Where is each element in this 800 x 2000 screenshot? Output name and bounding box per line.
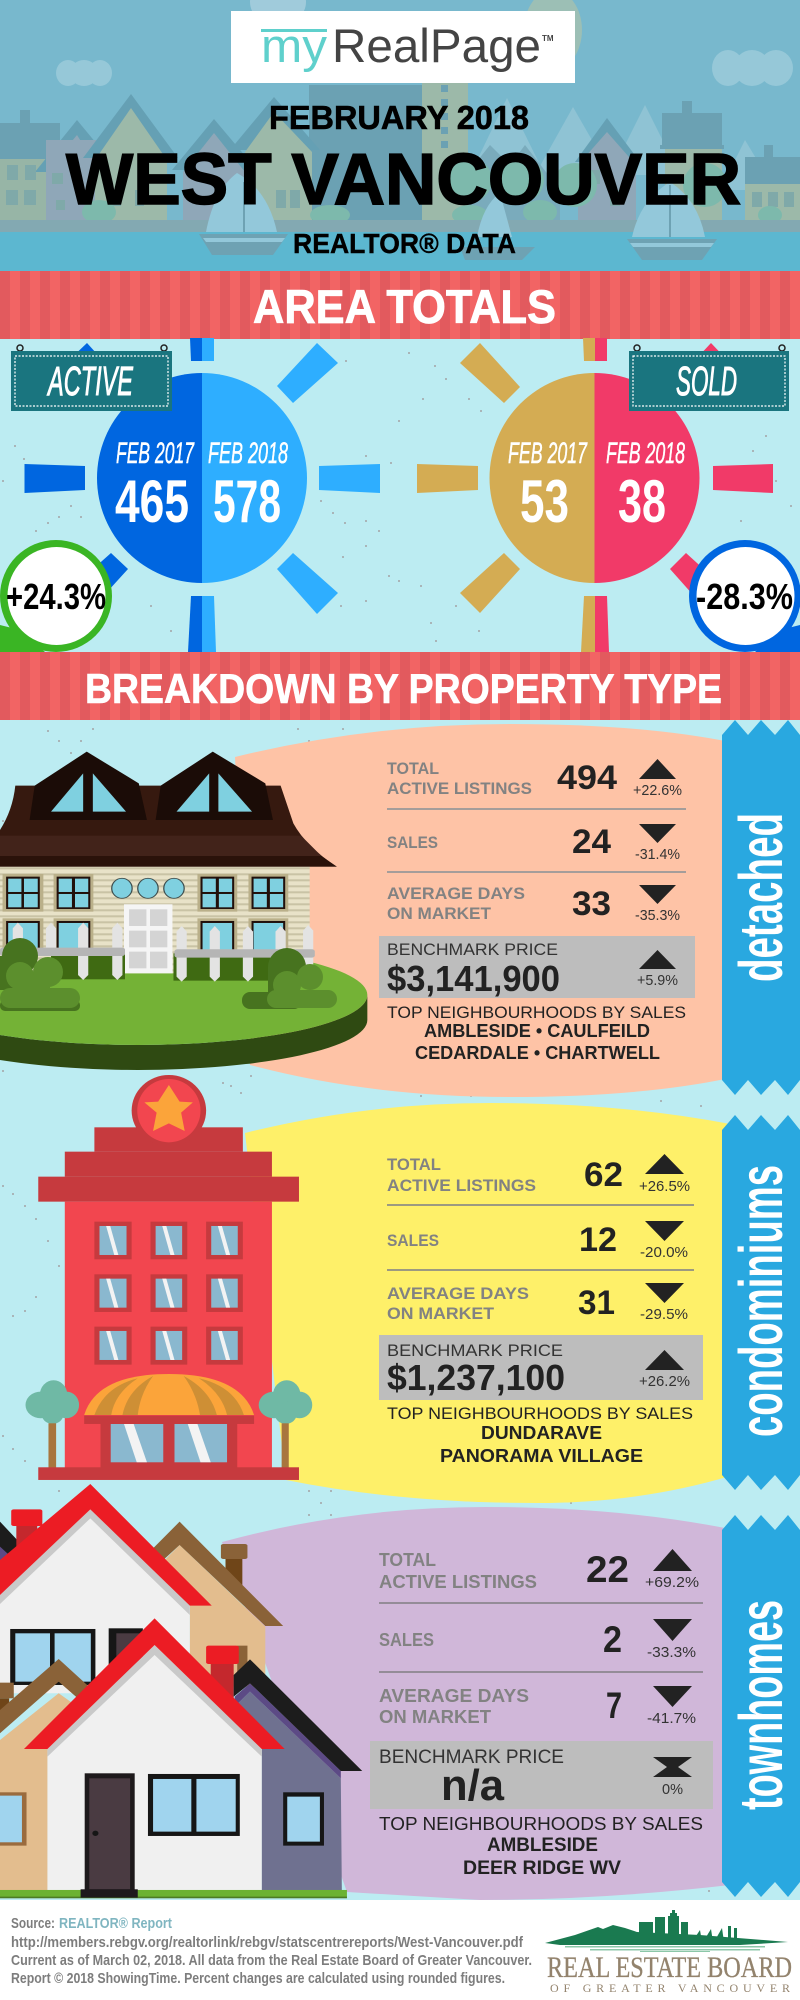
- ribbon: condominiums: [727, 1165, 795, 1437]
- values: 465: [115, 468, 189, 535]
- values: FEB 2017: [116, 437, 195, 470]
- benchmark price: +26.2%: [639, 1373, 690, 1390]
- top neighbourhoods: TOP NEIGHBOURHOODS BY SALES: [379, 1813, 703, 1834]
- values: [115, 437, 288, 535]
- illustration: apartment building: [26, 1075, 312, 1480]
- metric: sales: [387, 1221, 688, 1261]
- metric: average days on market: -35.3%: [635, 907, 680, 924]
- metric: average days on market: 33: [572, 885, 611, 923]
- metric: total active listings: ACTIVE LISTINGS: [387, 779, 532, 798]
- change badge: +24.3%: [6, 576, 106, 617]
- ribbon: [722, 1115, 800, 1490]
- stats: [370, 1549, 713, 1879]
- metric: total active listings: 22: [586, 1549, 629, 1590]
- logo: myRealPage: [231, 11, 575, 83]
- top neighbourhoods: TOP NEIGHBOURHOODS BY SALES: [387, 1003, 686, 1022]
- top neighbourhoods: [379, 1813, 703, 1879]
- sign: active: [11, 345, 172, 411]
- logo: real estate board: [545, 1910, 792, 1995]
- metric: average days on market: ON MARKET: [387, 1304, 495, 1323]
- values: 38: [618, 468, 666, 535]
- panel: sold sun: [417, 338, 800, 652]
- values: [508, 437, 685, 535]
- top neighbourhoods: AMBLESIDE • CAULFEILD: [424, 1021, 650, 1041]
- source notes: http://members.rebgv.org/realtorlink/rebgv/statscentrereports/West-Vancouver.pdf: [11, 1934, 524, 1951]
- banner: breakdown by property type: [0, 652, 800, 720]
- title block: [66, 100, 741, 259]
- benchmark price: 0%: [662, 1781, 683, 1798]
- metric: sales: 12: [579, 1221, 617, 1259]
- benchmark price: +5.9%: [637, 972, 678, 989]
- ribbon: detached: [727, 813, 795, 982]
- ribbon: [722, 1515, 800, 1897]
- benchmark price: n/a: [441, 1761, 505, 1810]
- blob: [222, 1507, 730, 1900]
- metric: total active listings: [387, 1154, 690, 1195]
- circle: [490, 373, 594, 583]
- metric: total active listings: TOTAL: [387, 1155, 441, 1174]
- metric: sales: -33.3%: [647, 1644, 696, 1661]
- top neighbourhoods: [387, 1404, 693, 1466]
- top neighbourhoods: DUNDARAVE: [481, 1423, 602, 1443]
- metric: sales: SALES: [387, 1231, 439, 1250]
- metric: sales: 2: [603, 1619, 622, 1660]
- source notes: REALTOR® Report: [59, 1915, 172, 1932]
- benchmark price: [370, 1741, 713, 1810]
- footer: [0, 1900, 800, 2000]
- benchmark price: [379, 1335, 703, 1400]
- circle: [97, 373, 202, 583]
- metric: total active listings: 62: [584, 1156, 623, 1194]
- metric: average days on market: [387, 1283, 688, 1323]
- metric: sales: -20.0%: [640, 1244, 688, 1261]
- metric: total active listings: [379, 1549, 699, 1592]
- metric: average days on market: ON MARKET: [379, 1707, 491, 1727]
- ribbon: townhomes: [727, 1600, 795, 1810]
- blob: [235, 724, 730, 1097]
- metric: total active listings: 494: [557, 759, 617, 797]
- metric: average days on market: AVERAGE DAYS: [379, 1686, 529, 1706]
- top neighbourhoods: PANORAMA VILLAGE: [440, 1446, 643, 1466]
- metric: sales: 24: [572, 823, 611, 861]
- metric: average days on market: [379, 1685, 696, 1727]
- benchmark price: $3,141,900: [387, 958, 560, 999]
- metric: average days on market: AVERAGE DAYS: [387, 884, 525, 903]
- banner: area totals: [0, 271, 800, 339]
- metric: average days on market: -29.5%: [640, 1306, 688, 1323]
- metric: total active listings: TOTAL: [379, 1550, 436, 1570]
- source notes: Source:: [11, 1915, 55, 1932]
- values: FEB 2018: [208, 437, 288, 470]
- metric: total active listings: +69.2%: [645, 1574, 699, 1591]
- metric: sales: -31.4%: [635, 846, 680, 863]
- rays: [417, 338, 773, 652]
- header scene: [0, 0, 800, 271]
- metric: total active listings: TOTAL: [387, 759, 439, 778]
- panel: active sun: [0, 338, 380, 652]
- benchmark price: BENCHMARK PRICE: [379, 1747, 564, 1768]
- metric: average days on market: 31: [578, 1284, 615, 1322]
- date heading: FEBRUARY 2018: [269, 100, 529, 137]
- metric: sales: SALES: [387, 833, 438, 852]
- metric: sales: [379, 1619, 696, 1661]
- banner: area totals: AREA TOTALS: [253, 280, 556, 333]
- values: FEB 2017: [508, 437, 588, 470]
- source notes: Current as of March 02, 2018. All data from the Real Estate Board of Greater Vancouver.: [11, 1952, 532, 1969]
- bush: right: [242, 948, 337, 1009]
- banner: breakdown by property type: BREAKDOWN BY PROPERTY TYPE: [85, 665, 722, 712]
- logo: real estate board: OF GREATER VANCOUVER: [550, 1981, 790, 1995]
- change badge: [689, 540, 800, 652]
- benchmark price: [379, 936, 695, 999]
- benchmark price: BENCHMARK PRICE: [387, 1341, 563, 1360]
- metric: total active listings: ACTIVE LISTINGS: [379, 1572, 537, 1592]
- top neighbourhoods: [387, 1003, 686, 1063]
- benchmark price: $1,237,100: [387, 1357, 565, 1398]
- illustration: townhouses: [0, 1484, 362, 1898]
- logo: myRealPage: my: [261, 19, 328, 72]
- logo: myRealPage: RealPage: [332, 19, 541, 72]
- metric: total active listings: ACTIVE LISTINGS: [387, 1176, 536, 1195]
- panel: detached: [0, 720, 800, 1097]
- metric: total active listings: +26.5%: [639, 1178, 690, 1195]
- top neighbourhoods: TOP NEIGHBOURHOODS BY SALES: [387, 1404, 693, 1423]
- main title: WEST VANCOUVER: [66, 139, 741, 220]
- subtitle: REALTOR® DATA: [293, 228, 516, 259]
- metric: average days on market: [387, 884, 680, 924]
- metric: average days on market: ON MARKET: [387, 904, 492, 923]
- blob: [245, 1103, 730, 1503]
- metric: total active listings: [387, 759, 682, 799]
- stats: [379, 1154, 703, 1466]
- top neighbourhoods: AMBLESIDE: [487, 1835, 598, 1856]
- values: FEB 2018: [606, 437, 685, 470]
- values: 578: [213, 468, 281, 535]
- values: 53: [520, 468, 569, 535]
- metric: average days on market: AVERAGE DAYS: [387, 1284, 529, 1303]
- metric: sales: [387, 823, 680, 863]
- sign: sold: [629, 345, 789, 411]
- panel: townhomes: [0, 1484, 800, 1900]
- metric: sales: SALES: [379, 1630, 434, 1650]
- metric: average days on market: 7: [606, 1685, 622, 1726]
- source notes: Report © 2018 ShowingTime. Percent changes are calculated using rounded figures.: [11, 1970, 505, 1987]
- top neighbourhoods: DEER RIDGE WV: [463, 1858, 621, 1879]
- panel: condominiums: [26, 1075, 800, 1503]
- logo: myRealPage: TM: [542, 34, 554, 43]
- change badge: [0, 540, 112, 652]
- stats: [379, 759, 695, 1063]
- bush: left: [0, 938, 80, 1011]
- sign: active: ACTIVE: [46, 358, 133, 404]
- metric: average days on market: -41.7%: [647, 1710, 696, 1727]
- metric: total active listings: +22.6%: [633, 782, 682, 799]
- illustration: house on lawn: [0, 752, 367, 1070]
- source notes: [11, 1915, 532, 1987]
- sign: sold: SOLD: [676, 358, 737, 404]
- benchmark price: BENCHMARK PRICE: [387, 940, 558, 959]
- ribbon: [722, 720, 800, 1095]
- rays: [24, 338, 380, 652]
- top neighbourhoods: CEDARDALE • CHARTWELL: [415, 1043, 660, 1063]
